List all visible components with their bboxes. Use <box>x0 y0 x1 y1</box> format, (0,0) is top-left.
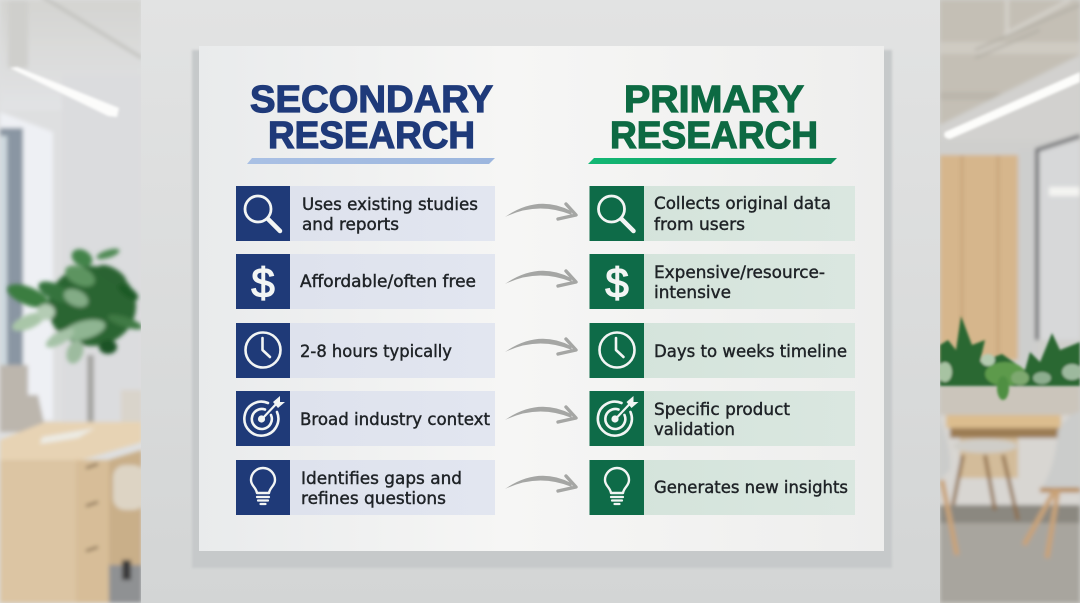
row 1 secondary: existing studies <box>236 186 495 241</box>
heading: secondary research: SECONDARY <box>250 79 493 121</box>
row 4 primary: validation <box>590 391 855 446</box>
right office background <box>938 0 1080 603</box>
icon: blurred planter greenery <box>938 316 1080 400</box>
icon: magnifying glass <box>245 196 280 231</box>
row 1 primary: original data <box>590 186 855 241</box>
row 3 primary: time <box>590 323 855 378</box>
heading: secondary research <box>250 79 493 157</box>
arrow row 4 <box>505 407 576 422</box>
row 4 primary: validation: Specific product <box>654 400 791 419</box>
row 2 primary: cost: intensive <box>654 283 731 302</box>
arrow row 5 <box>505 476 576 491</box>
icon: blurred office plant <box>4 246 144 366</box>
row 3 secondary: time <box>236 323 495 378</box>
icon: clock <box>246 332 280 368</box>
row 2 secondary: cost: Affordable/often free <box>300 272 476 291</box>
row 1 secondary: existing studies: Uses existing studies <box>302 195 478 214</box>
row 4 secondary: scope <box>236 391 495 446</box>
icon: target <box>244 396 285 436</box>
arrow row 1 <box>505 204 576 219</box>
icon: light bulb <box>605 468 629 504</box>
heading: primary research: RESEARCH <box>610 115 818 157</box>
row 5 secondary: outcome: Identifies gaps and <box>301 469 462 488</box>
row 2 secondary: cost <box>236 254 495 309</box>
arrow row 3 <box>505 339 576 354</box>
icon: magnifying glass <box>598 196 634 231</box>
board shadow <box>192 50 892 568</box>
row 3 primary: time: Days to weeks timeline <box>654 342 847 361</box>
heading: secondary research: RESEARCH <box>268 115 475 157</box>
row 3 secondary: time: 2-8 hours typically <box>300 342 452 361</box>
arrow row 2 <box>505 271 576 286</box>
row 4 primary: validation: validation <box>654 420 735 439</box>
left office background <box>0 0 145 603</box>
row 5 secondary: outcome: refines questions <box>301 489 446 508</box>
row 2 primary: cost: Expensive/resource- <box>654 263 825 282</box>
comparison board <box>199 46 884 551</box>
row 5 primary: outcome <box>590 460 855 515</box>
icon: dollar sign: $ <box>605 259 629 306</box>
row 2 primary: cost <box>590 254 855 309</box>
heading: primary research: PRIMARY <box>624 79 804 121</box>
row 1 primary: original data: Collects original data <box>654 194 831 213</box>
heading underline: primary <box>588 158 837 164</box>
wall panel <box>141 0 940 603</box>
row 5 secondary: outcome <box>236 460 495 515</box>
icon: target <box>598 396 638 436</box>
row 1 primary: original data: from users <box>654 215 745 234</box>
row 1 secondary: existing studies: and reports <box>302 215 399 234</box>
icon: light bulb <box>251 468 275 504</box>
heading underline: secondary <box>247 158 495 164</box>
heading: primary research <box>610 79 818 157</box>
icon: clock <box>600 332 634 368</box>
right ceiling light <box>944 72 1080 139</box>
row 5 primary: outcome: Generates new insights <box>654 478 848 497</box>
icon: dollar sign: $ <box>251 259 275 306</box>
row 4 secondary: scope: Broad industry context <box>300 410 491 429</box>
ceiling light <box>10 67 119 117</box>
